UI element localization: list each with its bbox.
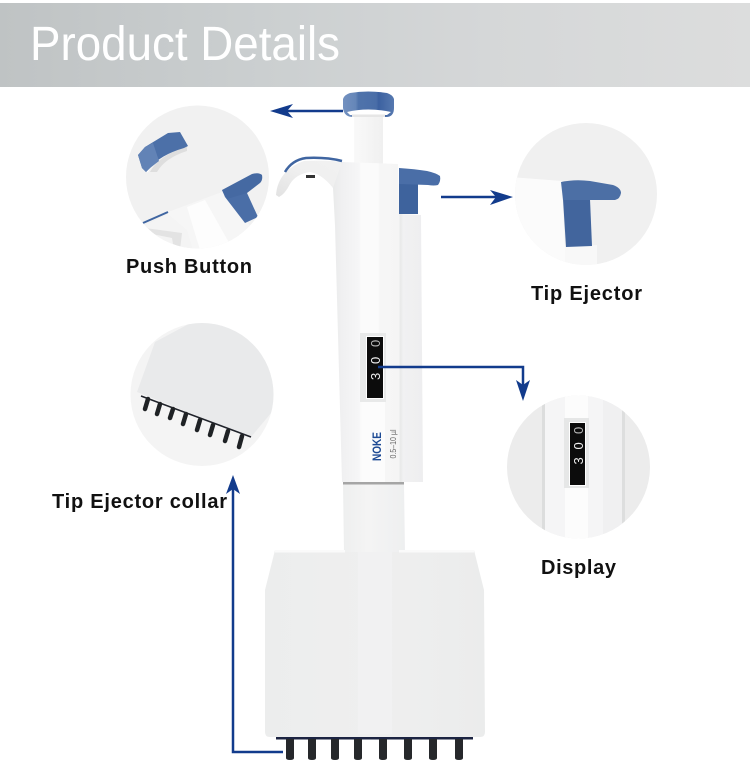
volume label: 0.5–10 µl [389, 429, 398, 458]
label: tip ejector: Tip Ejector [531, 283, 642, 305]
tip ejector lever [399, 168, 440, 214]
panel: display detail [507, 395, 650, 540]
blue cap [138, 132, 188, 172]
neck collar [343, 482, 404, 484]
panel: display detail: 0 [571, 427, 586, 434]
display window: 0 [368, 357, 383, 364]
panel: push button detail [126, 106, 269, 255]
ejector [222, 190, 258, 223]
display window [360, 333, 386, 402]
body [160, 192, 262, 255]
label: display: Display [541, 557, 617, 579]
label: push button: Push Button [126, 256, 252, 278]
pipette product [265, 92, 485, 760]
centre ridge [358, 552, 392, 734]
arrow: tip ejector [441, 190, 513, 205]
panel: display detail: 0 [571, 442, 586, 450]
display window: 0 [368, 340, 383, 347]
panel: tip ejector detail [510, 123, 657, 270]
plunger shaft [354, 114, 383, 165]
label: tip ejector collar: Tip Ejector collar [52, 491, 227, 513]
display window: 3 [368, 373, 383, 380]
title: Product Details [30, 18, 340, 71]
arrow: push button [270, 104, 343, 118]
panel: tip ejector collar detail [130, 323, 274, 466]
finger hook [276, 158, 346, 197]
multichannel block [265, 550, 485, 737]
header banner [0, 3, 750, 87]
tip row [276, 737, 473, 760]
ring under cap [150, 146, 187, 172]
arrow: tip ejector collar [226, 475, 283, 752]
arrow: display [378, 367, 530, 401]
push button cap [343, 92, 394, 117]
hook line [143, 212, 168, 223]
pipette body [333, 162, 423, 482]
panel: display detail: 3 [571, 457, 586, 464]
brand logo: NOKE [372, 432, 384, 461]
